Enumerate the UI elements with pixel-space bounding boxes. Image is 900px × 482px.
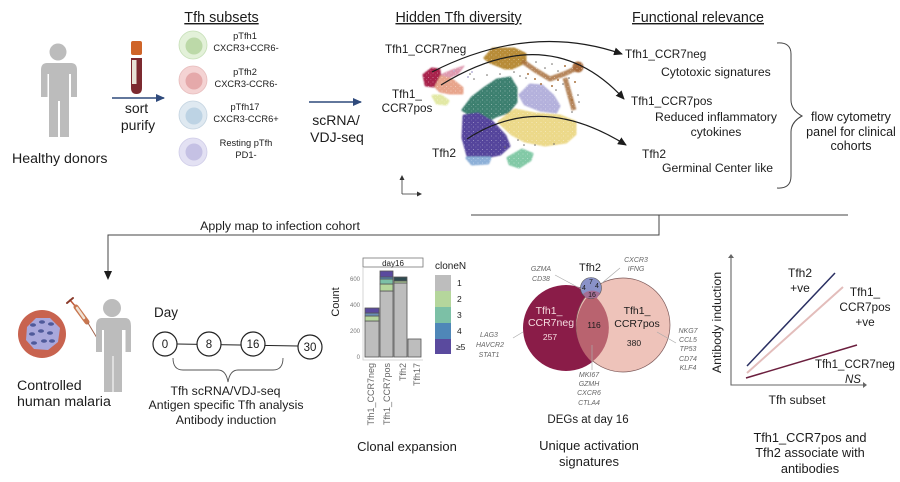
label: Tfh1_CCR7pos +ve: CCR7pos bbox=[839, 300, 891, 314]
label: Tfh1_CCR7neg NS: Tfh1_CCR7neg bbox=[815, 359, 895, 371]
label: healthy donors: Healthy donors bbox=[12, 151, 107, 167]
chart: clone bars: Tfh1_CCR7pos bbox=[382, 363, 392, 425]
chart: venn diagram: CCR7pos bbox=[614, 318, 660, 330]
gene labels bbox=[476, 257, 699, 407]
gene labels: HAVCR2 bbox=[476, 342, 504, 349]
gene labels: NKG7 bbox=[678, 328, 699, 335]
text: flow cytometry panel: panel for clinical bbox=[806, 125, 896, 139]
label: pTfh1: pTfh1 bbox=[233, 31, 257, 41]
chart: clone bars: Tfh2 bbox=[398, 363, 408, 381]
timeline: 8 bbox=[206, 339, 212, 351]
text: flow cytometry panel: flow cytometry bbox=[811, 110, 892, 124]
bracket bbox=[777, 43, 802, 188]
label: unique activation signatures: Unique activation bbox=[539, 438, 639, 453]
text: day analyses: Antigen specific Tfh analysis bbox=[149, 398, 303, 412]
gene labels: LAG3 bbox=[480, 332, 498, 339]
label: Tfh2 +ve: +ve bbox=[790, 281, 810, 295]
text: reduced inflammatory cytokines: cytokines bbox=[691, 125, 741, 139]
text: functional Tfh2: Tfh2 bbox=[642, 147, 666, 161]
heading: Functional relevance: Functional relevance bbox=[632, 10, 764, 26]
text: cytotoxic signatures: Cytotoxic signatures bbox=[661, 65, 771, 79]
chart: venn diagram: Tfh1_ bbox=[624, 305, 651, 317]
text: flow cytometry panel: cohorts bbox=[830, 139, 872, 153]
text: day analyses: Tfh scRNA/VDJ-seq bbox=[170, 384, 281, 398]
legend: cloneN: cloneN bbox=[435, 261, 466, 272]
label: controlled human malaria: human malaria bbox=[17, 394, 111, 410]
heading: Tfh subsets: Tfh subsets bbox=[184, 10, 259, 26]
label: sort: sort bbox=[125, 100, 148, 116]
chart: venn diagram: 16 bbox=[588, 292, 596, 299]
icon: malaria person bbox=[96, 299, 131, 392]
icon: infected cell bbox=[18, 310, 66, 358]
cell: pTfh17 bbox=[179, 101, 207, 129]
gene labels: IFNG bbox=[628, 266, 645, 273]
label: Tfh2 venn: Tfh2 bbox=[579, 262, 601, 274]
label: resting pTfh: PD1- bbox=[235, 150, 257, 160]
timeline: 30 bbox=[304, 342, 316, 354]
label: Day: Day bbox=[154, 305, 178, 320]
gene labels: MKI67 bbox=[579, 372, 600, 379]
text: functional Tfh1_CCR7neg: Tfh1_CCR7neg bbox=[625, 48, 706, 61]
timeline bbox=[153, 332, 322, 359]
chart: clone bars: 0 bbox=[357, 355, 361, 361]
arrow: sort purify bbox=[112, 97, 164, 99]
text: reduced inflammatory cytokines: Reduced inflammatory bbox=[655, 110, 778, 124]
label: Tfh2: Tfh2 bbox=[432, 146, 456, 160]
icon: syringe bbox=[67, 298, 97, 338]
label: Tfh1_CCR7pos +ve: Tfh1_ bbox=[850, 285, 881, 299]
chart: antibody induction bbox=[710, 254, 867, 407]
label: pTfh1: CXCR3+CCR6- bbox=[213, 43, 279, 53]
heading: Hidden Tfh diversity: Hidden Tfh diversity bbox=[395, 10, 522, 26]
chart: venn diagram: 116 bbox=[587, 320, 601, 330]
gene labels: CCL5 bbox=[679, 337, 697, 344]
gene labels: TP53 bbox=[680, 346, 696, 353]
chart: venn diagram bbox=[523, 278, 670, 372]
label: unique activation signatures: signatures bbox=[559, 454, 619, 469]
cell: pTfh2 bbox=[179, 66, 207, 94]
chart: antibody induction: Tfh subset bbox=[769, 393, 826, 407]
cell: resting pTfh bbox=[179, 138, 207, 166]
label: purify: purify bbox=[121, 117, 155, 133]
label: apply map: Apply map to infection cohort bbox=[200, 219, 360, 233]
gene labels: CTLA4 bbox=[578, 400, 600, 407]
gene labels: CXCR3 bbox=[624, 257, 648, 264]
label: scRNA/VDJ-seq: scRNA/ bbox=[312, 112, 360, 128]
label: pTfh2: CXCR3-CCR6- bbox=[214, 79, 278, 89]
label: Tfh1_CCR7neg NS: NS bbox=[845, 374, 861, 386]
label: Tfh2 +ve: Tfh2 bbox=[788, 266, 812, 280]
chart: UMAP clusters bbox=[423, 47, 585, 169]
brace bbox=[173, 358, 283, 382]
chart: clone bars: day16 bbox=[382, 259, 404, 268]
legend: cloneN: ≥5 bbox=[456, 342, 466, 352]
text: day analyses: Antibody induction bbox=[176, 413, 276, 427]
label: Tfh1_CCR7pos +ve: +ve bbox=[855, 315, 875, 329]
text: functional Tfh1_CCR7pos: Tfh1_CCR7pos bbox=[631, 94, 712, 108]
arrow: CCR7neg path bbox=[432, 42, 622, 72]
arrow: Tfh2 path bbox=[467, 116, 626, 145]
chart: antibody induction: Antibody induction bbox=[710, 272, 724, 373]
label: pTfh2: pTfh2 bbox=[233, 67, 257, 77]
label: association summary: antibodies bbox=[781, 461, 839, 476]
legend: cloneN: 3 bbox=[457, 310, 462, 320]
chart: clone bars: 200 bbox=[350, 329, 361, 335]
text: germinal center like: Germinal Center like bbox=[662, 161, 773, 175]
label: controlled human malaria: Controlled bbox=[17, 378, 82, 394]
chart: clone bars: Count bbox=[330, 287, 342, 317]
label: pTfh17: pTfh17 bbox=[231, 102, 259, 112]
gene labels: STAT1 bbox=[479, 352, 499, 359]
chart: venn diagram: CCR7neg bbox=[528, 317, 574, 329]
label: clonal expansion: Clonal expansion bbox=[357, 439, 457, 454]
label: association summary: Tfh2 associate with bbox=[755, 445, 865, 460]
arrow: to scRNA bbox=[309, 101, 361, 103]
gene labels: CXCR6 bbox=[577, 390, 601, 397]
label: DEGs at day 16: DEGs at day 16 bbox=[547, 414, 629, 426]
cell: pTfh1 bbox=[179, 31, 207, 59]
legend: cloneN bbox=[435, 261, 466, 354]
chart: clone bars: Tfh17 bbox=[412, 363, 422, 386]
chart: clone bars: 600 bbox=[350, 277, 361, 283]
chart: clone bars bbox=[330, 258, 423, 426]
timeline: 16 bbox=[247, 339, 259, 351]
icon: blood tube bbox=[131, 41, 142, 94]
label: association summary: Tfh1_CCR7pos and bbox=[753, 430, 867, 445]
chart: venn diagram: 380 bbox=[627, 338, 641, 348]
chart: venn diagram: 257 bbox=[543, 332, 557, 342]
chart: clone bars: 400 bbox=[350, 303, 361, 309]
label: resting pTfh: Resting pTfh bbox=[220, 138, 272, 148]
label: pTfh17: CXCR3-CCR6+ bbox=[213, 114, 279, 124]
legend: cloneN: 4 bbox=[457, 326, 462, 336]
chart: venn diagram: 4 bbox=[595, 283, 599, 290]
label: scRNA/VDJ-seq: VDJ-seq bbox=[310, 129, 364, 145]
chart: venn diagram: Tfh1_ bbox=[536, 305, 563, 317]
chart: clone bars: Tfh1_CCR7neg bbox=[366, 363, 376, 426]
legend: cloneN: 1 bbox=[457, 278, 462, 288]
icon: UMAP axes bbox=[402, 176, 421, 194]
icon: healthy donor person bbox=[41, 44, 77, 137]
label: Tfh1_CCR7pos: CCR7pos bbox=[382, 102, 432, 115]
chart: venn diagram: 4 bbox=[582, 285, 586, 292]
gene labels: GZMH bbox=[579, 381, 600, 388]
gene labels: KLF4 bbox=[680, 365, 696, 372]
gene labels: CD74 bbox=[679, 356, 697, 363]
chart: venn diagram: 7 bbox=[589, 279, 593, 286]
gene labels: GZMA bbox=[531, 266, 551, 273]
connector: apply map bbox=[108, 215, 848, 279]
legend: cloneN: 2 bbox=[457, 294, 462, 304]
label: Tfh1_CCR7pos: Tfh1_ bbox=[392, 88, 422, 101]
gene labels: CD38 bbox=[532, 276, 550, 283]
timeline: 0 bbox=[162, 339, 168, 351]
label: Tfh1_CCR7neg: Tfh1_CCR7neg bbox=[385, 43, 466, 56]
arrow: CCR7pos path bbox=[441, 55, 624, 99]
